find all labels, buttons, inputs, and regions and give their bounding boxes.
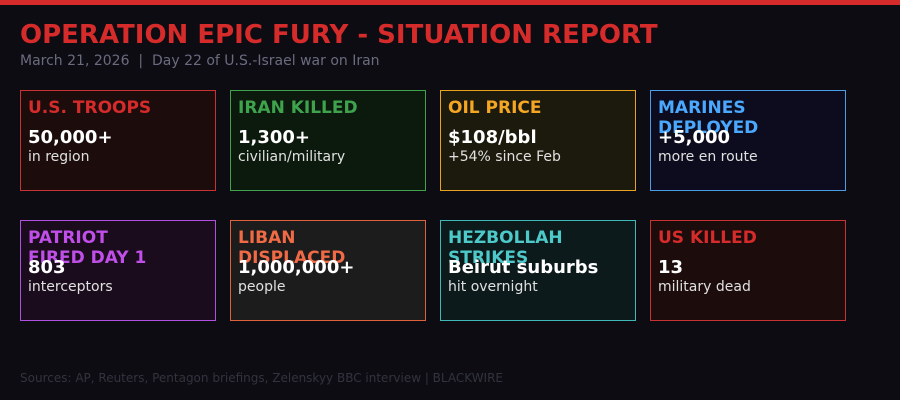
card: liban displaced: DISPLACED: [238, 248, 345, 268]
card: marines: +5,000: [658, 127, 730, 148]
card: hezbollah: hit overnight: [448, 279, 538, 295]
card: Iran killed: civilian/military: [238, 149, 345, 165]
card: liban displaced: LIBAN: [238, 228, 296, 248]
card: hezbollah: HEZBOLLAH: [448, 228, 563, 248]
card: US killed: 13: [658, 257, 683, 278]
card: marines: MARINES: [658, 98, 746, 118]
card: US troops: 50,000+: [28, 127, 113, 148]
title: OPERATION EPIC FURY - SITUATION REPORT: [20, 20, 658, 50]
card: Iran killed: [230, 90, 426, 190]
card: liban displaced: people: [238, 279, 285, 295]
card: US killed: military dead: [658, 279, 751, 295]
card: US troops: U.S. TROOPS: [28, 98, 151, 118]
card: US killed: US KILLED: [658, 228, 757, 248]
card: liban displaced: 1,000,000+: [238, 257, 354, 278]
card: marines: DEPLOYED: [658, 118, 758, 138]
card: marines: more en route: [658, 149, 758, 165]
card: patriot: interceptors: [28, 279, 113, 295]
card: Iran killed: 1,300+: [238, 127, 310, 148]
card: hezbollah: [440, 220, 636, 320]
footer sources: Sources: AP, Reuters, Pentagon briefings, Zelenskyy BBC interview | BLACKWIRE: [20, 371, 503, 385]
card: oil price: $108/bbl: [448, 127, 537, 148]
card: Iran killed: IRAN KILLED: [238, 98, 358, 118]
card: oil price: [440, 90, 636, 190]
top bar: [0, 0, 900, 5]
card: patriot: [20, 220, 216, 320]
card: liban displaced: [230, 220, 426, 320]
card: US troops: [20, 90, 216, 190]
card: US troops: in region: [28, 149, 90, 165]
subtitle: March 21, 2026 | Day 22 of U.S.-Israel war on Iran: [20, 53, 380, 69]
card: patriot: FIRED DAY 1: [28, 248, 146, 268]
card: patriot: 803: [28, 257, 66, 278]
card: hezbollah: STRIKES: [448, 248, 528, 268]
card: marines: [650, 90, 846, 190]
card: US killed: [650, 220, 846, 320]
card: patriot: PATRIOT: [28, 228, 108, 248]
card: hezbollah: Beirut suburbs: [448, 257, 598, 278]
card: oil price: OIL PRICE: [448, 98, 542, 118]
card: oil price: +54% since Feb: [448, 149, 561, 165]
